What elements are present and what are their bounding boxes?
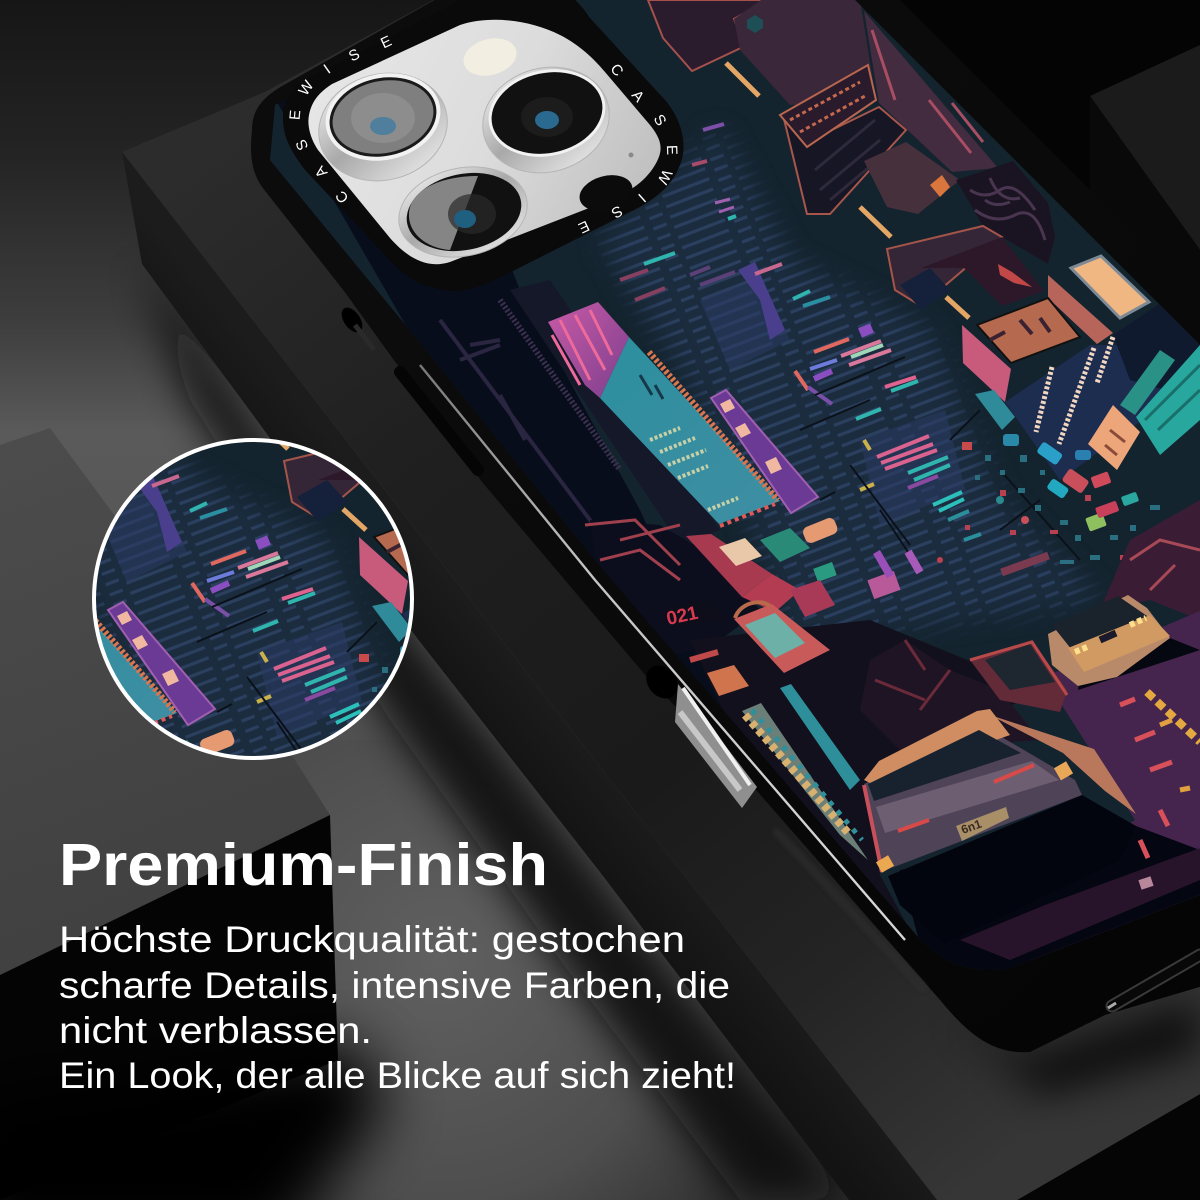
brand lettering ring: C [607, 61, 627, 80]
brand lettering ring: S [346, 46, 363, 65]
lens bottom [390, 155, 536, 269]
block: lower left pedestal front face [0, 815, 390, 1200]
brand lettering ring: E [663, 145, 680, 155]
body text: Höchste Druckqualität: gestochen [59, 919, 685, 960]
flash [459, 33, 521, 81]
phone case [250, 0, 1200, 1052]
magnified detail circle [92, 438, 414, 760]
lidar sensor [576, 170, 636, 216]
icon: mute switch [337, 304, 374, 350]
brand lettering ring: I [321, 61, 334, 78]
block: lower left pedestal top face [0, 428, 330, 975]
icon: volume button slot [400, 372, 478, 470]
brand lettering ring: A [312, 163, 331, 181]
brand lettering ring: S [650, 112, 669, 129]
icon: silver power button [675, 684, 757, 808]
brand lettering ring: W [653, 167, 675, 188]
brand lettering ring: E [287, 109, 304, 121]
screen artwork [250, 0, 1200, 970]
brand lettering ring: I [634, 190, 649, 205]
brand lettering ring: E [576, 217, 592, 236]
body text: Ein Look, der alle Blicke auf sich zieht! [59, 1055, 736, 1096]
icon: charging port [1108, 955, 1200, 1008]
body text: scharfe Details, intensive Farben, die [59, 965, 730, 1006]
block: top right pedestal [1090, 45, 1200, 420]
brand lettering ring [287, 33, 680, 236]
phone shadow [950, 1000, 1200, 1095]
icon: side button hole [640, 659, 684, 705]
lens top right [471, 53, 621, 187]
lens top left [306, 59, 460, 195]
brand lettering ring: S [608, 202, 625, 221]
body text: nicht verblassen. [59, 1010, 372, 1051]
brand lettering ring: S [293, 137, 312, 153]
microphone dot [628, 152, 634, 158]
rim highlight [420, 365, 905, 940]
brand lettering ring: C [332, 187, 352, 206]
camera ring [283, 0, 684, 291]
title: Premium-Finish [59, 832, 548, 898]
camera plateau [308, 20, 661, 264]
block: central pedestal side face [122, 152, 937, 1200]
case gloss [775, 830, 925, 990]
brand lettering ring: A [628, 87, 647, 106]
brand lettering ring: E [378, 33, 394, 52]
camera island [283, 0, 684, 291]
block: floor [200, 740, 1000, 1200]
brand lettering ring: W [295, 77, 318, 99]
body text [59, 919, 736, 1096]
block: pedestal cast shadow [142, 264, 849, 1200]
